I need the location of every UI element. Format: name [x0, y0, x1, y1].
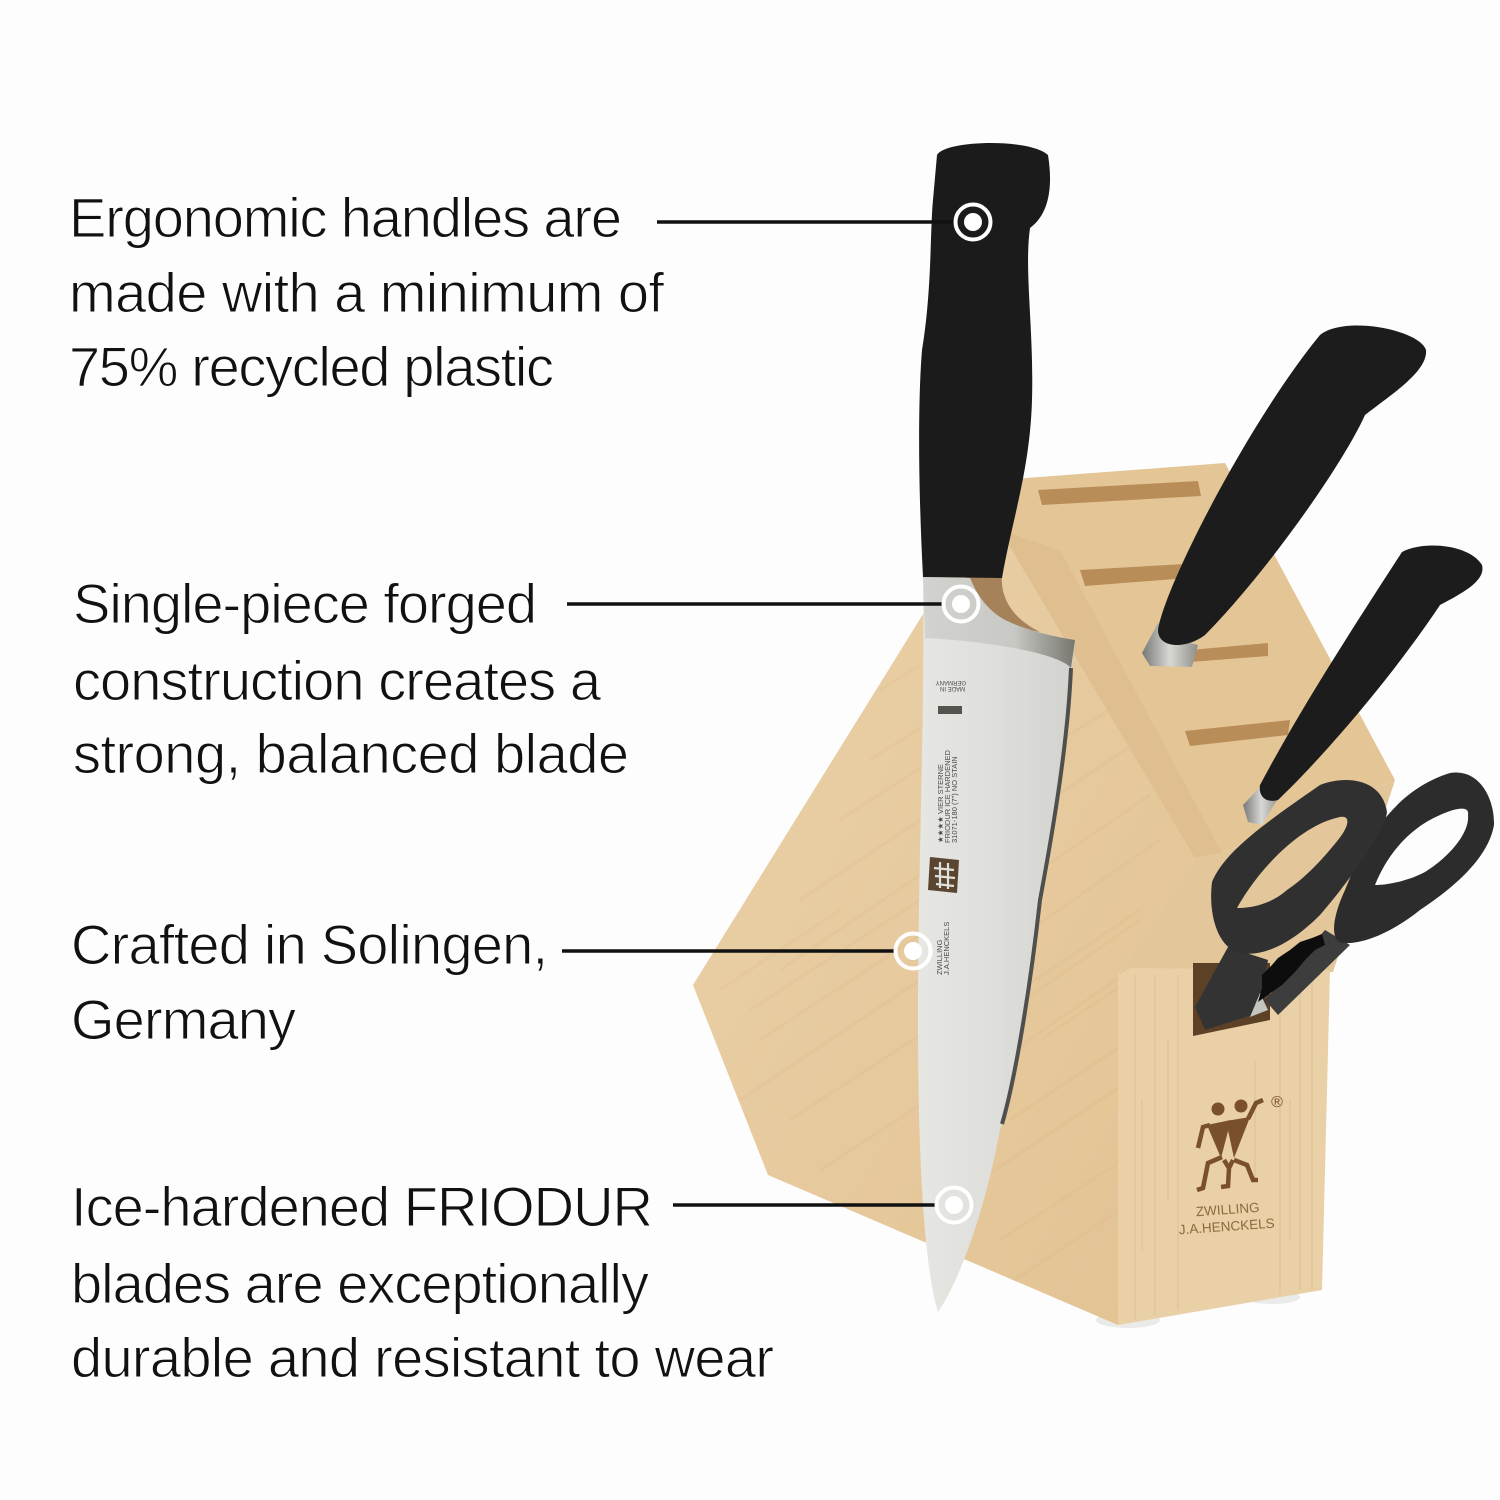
text: forged construction: construction creates a — [73, 649, 602, 712]
blade etched text and logo — [928, 679, 966, 975]
callout 4: FRIODUR — [71, 1175, 972, 1389]
block logo: J.A.HENCKELS — [1178, 1216, 1275, 1237]
pointer line — [562, 949, 895, 953]
text: ergonomic handles: 75% recycled plastic — [69, 335, 554, 398]
marker — [896, 934, 930, 968]
wooden block side under slots — [1118, 780, 1395, 975]
wooden block front face — [1118, 968, 1330, 1325]
utility knife — [1142, 326, 1426, 667]
wood grain on front — [1135, 975, 1312, 1320]
marker — [944, 586, 978, 622]
text: forged construction: Single-piece forged — [73, 572, 537, 635]
text: Solingen: Crafted in Solingen, — [71, 913, 548, 976]
block logo: ® — [1271, 1094, 1283, 1111]
wooden block top face — [1000, 463, 1395, 858]
bolster shadow — [965, 575, 1040, 632]
pointer line — [567, 602, 943, 606]
callout 1: ergonomic handles — [69, 186, 990, 398]
knife block set illustration — [693, 143, 1494, 1328]
bolster — [923, 577, 1075, 668]
scissor slot — [1193, 963, 1270, 1036]
text: FRIODUR: blades are exceptionally — [71, 1252, 649, 1315]
text: FRIODUR: durable and resistant to wear — [71, 1326, 774, 1389]
callout 2: forged construction — [73, 572, 978, 785]
chef knife blade — [918, 577, 1075, 1312]
text: FRIODUR: Ice-hardened FRIODUR — [71, 1175, 653, 1238]
pointer line — [657, 220, 955, 224]
block logo: ZWILLING — [1195, 1200, 1260, 1219]
logo twins — [1197, 1100, 1263, 1190]
blade etched text and logo: ★★★★ VIER STERNE — [936, 764, 945, 843]
blade etched text and logo: J.A.HENCKELS — [942, 922, 951, 975]
text: forged construction: strong, balanced blade — [73, 722, 629, 785]
blade etched text and logo: ZWILLING — [935, 939, 944, 975]
blade etched text and logo: GERMANY — [936, 679, 966, 685]
blade edge shadow — [1002, 668, 1071, 1124]
kitchen shears — [1195, 772, 1494, 1030]
marker — [956, 204, 990, 240]
callout 3: Solingen — [71, 913, 930, 1051]
blade etched text and logo: MADE IN — [940, 685, 965, 691]
lower jaw — [1265, 930, 1350, 1015]
right loop — [1334, 772, 1494, 943]
left loop — [1211, 780, 1387, 954]
serrated teeth — [1258, 934, 1325, 1002]
chef knife handle — [919, 143, 1050, 578]
block slots — [1038, 481, 1290, 746]
etched logo — [928, 857, 959, 893]
text: ergonomic handles: made with a minimum of — [69, 261, 664, 324]
text: ergonomic handles: Ergonomic handles are — [69, 186, 622, 249]
upper jaw — [1195, 947, 1268, 1030]
block rubber feet — [1096, 1290, 1300, 1328]
blade etched text and logo: FRIODUR ICE HARDENED — [943, 749, 952, 843]
paring knife — [1243, 546, 1482, 825]
top face shading — [1000, 530, 1222, 858]
block logo — [1178, 1094, 1283, 1237]
text: Solingen: Germany — [71, 988, 296, 1051]
wood grain on side — [720, 665, 1160, 1290]
blade etched text and logo: 31071-180 (7") NO STAIN — [950, 756, 959, 843]
pointer line — [673, 1203, 936, 1207]
marker — [936, 1188, 972, 1222]
wooden block left side — [693, 490, 1195, 1325]
